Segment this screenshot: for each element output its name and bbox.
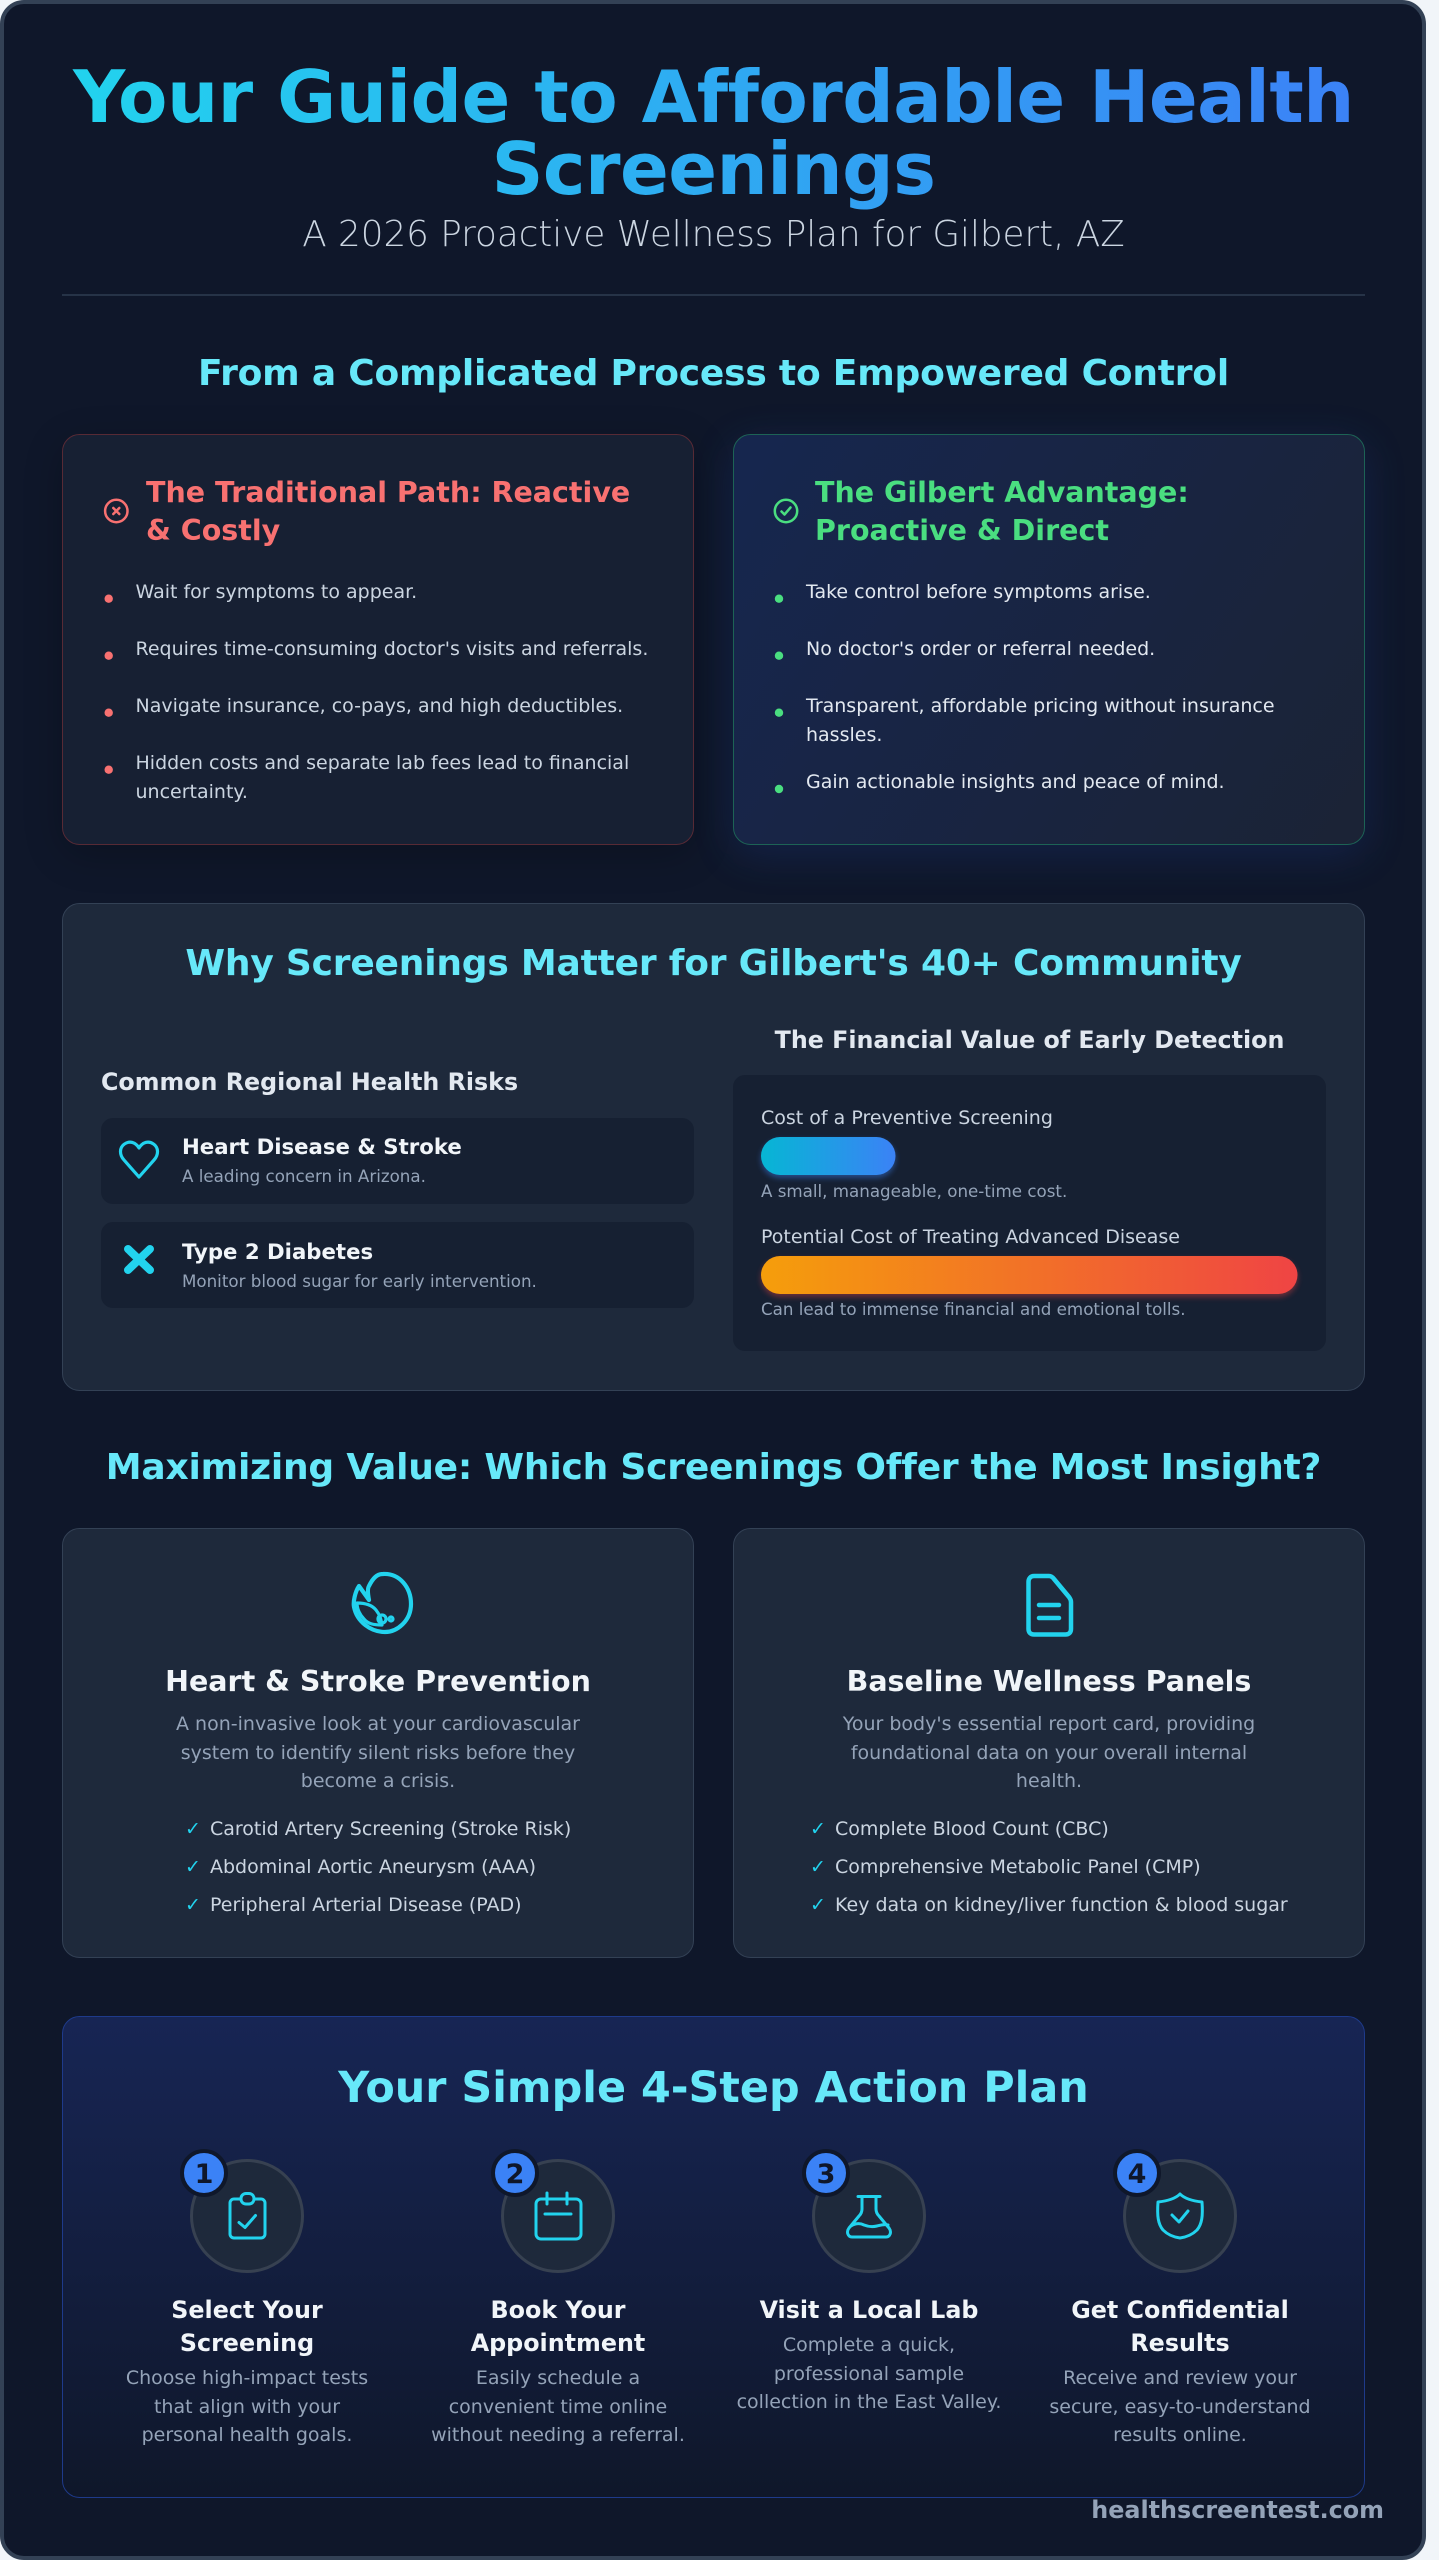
list: gilbert benefits: No doctor's order or referral needed. (806, 638, 1155, 660)
title (72, 55, 1354, 211)
list: traditional drawbacks: Wait for symptoms to appear. (136, 581, 417, 603)
bar: preventive cost (761, 1137, 896, 1175)
text: step 4: Get Confidential (1071, 2296, 1289, 2324)
icon: clipboard (230, 2194, 265, 2238)
panel: gilbert advantage (733, 434, 1365, 855)
text: step 2 (431, 2296, 685, 2446)
list: baseline tests: Comprehensive Metabolic Panel (CMP) (835, 1856, 1201, 1878)
label: heart disease (182, 1135, 462, 1186)
step 4: get results (1049, 2151, 1311, 2446)
label: advanced disease cost: Potential Cost of Treating Advanced Disease (761, 1226, 1180, 1248)
text: heart description: become a crisis. (301, 1770, 455, 1792)
badge: 2 (493, 2151, 537, 2195)
badge: 1: 1 (195, 2159, 213, 2190)
list: traditional drawbacks: uncertainty. (136, 781, 248, 803)
text: step 4: results online. (1113, 2424, 1247, 2446)
icon: document (1028, 1576, 1071, 1634)
list: heart screenings: Carotid Artery Screening (Stroke Risk) (210, 1818, 571, 1840)
panel: action plan (62, 2016, 1364, 2498)
icon: shield (1158, 2194, 1202, 2238)
text: step 2: Book Your (490, 2296, 626, 2324)
text: step 1 (126, 2296, 368, 2446)
heading: maximizing value: Maximizing Value: Which Screenings Offer the Most Insight? (106, 1447, 1321, 1488)
text: step 4 (1049, 2296, 1311, 2446)
label: heart disease: Heart Disease & Stroke (182, 1135, 462, 1160)
heading: gilbert advantage: The Gilbert Advantage: (815, 476, 1189, 509)
heading: heart and stroke: Heart & Stroke Prevention (165, 1665, 591, 1698)
label: diabetes: Type 2 Diabetes (182, 1240, 373, 1265)
list: baseline tests: ✓ (810, 1894, 826, 1916)
text: baseline description: health. (1016, 1770, 1082, 1792)
list: gilbert benefits: Take control before symptoms arise. (805, 581, 1151, 603)
heading: baseline panels: Baseline Wellness Panels (847, 1665, 1251, 1698)
text: step 4: Results (1130, 2329, 1230, 2357)
text: step 1: personal health goals. (142, 2424, 352, 2446)
text: step 3: collection in the East Valley. (737, 2391, 1001, 2413)
list: traditional drawbacks: Navigate insurance, co-pays, and high deductibles. (136, 695, 623, 717)
heading: why screenings matter: Why Screenings Matter for Gilbert's 40+ Community (185, 943, 1242, 984)
badge: 1 (182, 2151, 226, 2195)
list: heart screenings: ✓ (185, 1856, 201, 1878)
list: baseline tests (810, 1818, 1288, 1916)
text: step 1: that align with your (154, 2396, 340, 2418)
bar: advanced disease cost (761, 1256, 1298, 1294)
text: heart description (176, 1713, 580, 1792)
step 1: select screening (126, 2151, 368, 2446)
label: diabetes: Monitor blood sugar for early intervention. (182, 1271, 537, 1291)
text: step 4: secure, easy-to-understand (1049, 2396, 1311, 2418)
icon: heart (120, 1142, 158, 1177)
list: baseline tests: Complete Blood Count (CBC) (835, 1818, 1109, 1840)
list: gilbert benefits: Transparent, affordable pricing without insurance (805, 695, 1275, 717)
step 3: visit lab (737, 2151, 1001, 2413)
heading: financial value: The Financial Value of Early Detection (775, 1026, 1284, 1054)
badge: 4 (1115, 2151, 1159, 2195)
heading: gilbert advantage (815, 476, 1189, 547)
note: preventive cost: A small, manageable, one-time cost. (761, 1181, 1067, 1201)
icon: circle x (105, 500, 128, 522)
text: step 3: professional sample (774, 2363, 964, 2385)
list: traditional drawbacks (104, 581, 648, 803)
text: baseline description: Your body's essential report card, providing (842, 1713, 1255, 1735)
step 2: book appointment (431, 2151, 685, 2446)
text: heart description: system to identify silent risks before they (181, 1742, 575, 1764)
list: gilbert benefits: Gain actionable insights and peace of mind. (806, 771, 1225, 793)
text: baseline description (842, 1713, 1255, 1792)
list: baseline tests: ✓ (810, 1856, 826, 1878)
chart: cost comparison (733, 1075, 1326, 1351)
icon: heart health (354, 1574, 411, 1632)
text: step 1: Choose high-impact tests (126, 2367, 368, 2389)
icon: x mark (128, 1249, 150, 1270)
text: step 2: Appointment (471, 2329, 645, 2357)
list: heart screenings: Abdominal Aortic Aneurysm (AAA) (210, 1856, 536, 1878)
list: baseline tests: Key data on kidney/liver function & blood sugar (835, 1894, 1288, 1916)
heading: traditional path: & Costly (146, 514, 281, 547)
text: step 3 (737, 2296, 1001, 2413)
footer: website: healthscreentest.com (1091, 2496, 1384, 2524)
text: step 4: Receive and review your (1063, 2367, 1297, 2389)
title: Your Guide to Affordable Health (72, 55, 1354, 139)
badge: 3: 3 (817, 2159, 835, 2190)
icon: flask (848, 2196, 890, 2237)
list: heart screenings: ✓ (185, 1894, 201, 1916)
text: step 1: Screening (180, 2329, 314, 2357)
icon: circle check (775, 500, 797, 522)
heading: traditional path: The Traditional Path: Reactive (146, 476, 630, 509)
list: traditional drawbacks: Requires time-consuming doctor's visits and referrals. (136, 638, 648, 660)
heading: regional risks: Common Regional Health Risks (101, 1068, 518, 1096)
text: baseline description: foundational data on your overall internal (851, 1742, 1247, 1764)
text: step 2: Easily schedule a (476, 2367, 640, 2389)
text: heart description: A non-invasive look at your cardiovascular (176, 1713, 580, 1735)
panel: why screenings matter (62, 904, 1364, 1390)
icon: calendar (536, 2193, 581, 2239)
text: step 3: Complete a quick, (783, 2334, 955, 2356)
heading: from complicated to empowered: From a Complicated Process to Empowered Control (198, 353, 1229, 394)
subtitle: A 2026 Proactive Wellness Plan for Gilbert, AZ (302, 214, 1125, 255)
panel: heart and stroke prevention (62, 1528, 694, 1958)
panel: baseline wellness (734, 1528, 1364, 1958)
label: heart disease: A leading concern in Arizona. (182, 1166, 426, 1186)
list: heart screenings (185, 1818, 571, 1916)
note: advanced disease cost: Can lead to immense financial and emotional tolls. (761, 1299, 1186, 1319)
text: step 3: Visit a Local Lab (760, 2296, 978, 2324)
list: baseline tests: ✓ (810, 1818, 826, 1840)
badge: 2: 2 (506, 2159, 524, 2190)
panel: traditional path (62, 434, 694, 855)
label: preventive cost: Cost of a Preventive Screening (761, 1107, 1053, 1129)
badge: 3 (804, 2151, 848, 2195)
heading: traditional path (146, 476, 630, 547)
label: diabetes (182, 1240, 537, 1291)
text: step 2: without needing a referral. (431, 2424, 685, 2446)
heading: gilbert advantage: Proactive & Direct (815, 514, 1109, 547)
list: gilbert benefits (775, 581, 1275, 793)
card: diabetes (101, 1222, 694, 1308)
list: traditional drawbacks: Hidden costs and separate lab fees lead to financial (136, 752, 629, 774)
list: heart screenings: Peripheral Arterial Disease (PAD) (210, 1894, 522, 1916)
text: step 2: convenient time online (449, 2396, 667, 2418)
list: heart screenings: ✓ (185, 1818, 201, 1840)
card: heart disease (101, 1118, 694, 1204)
badge: 4: 4 (1128, 2159, 1146, 2190)
title: Screenings (492, 127, 935, 211)
text: step 1: Select Your (171, 2296, 323, 2324)
heading: action plan: Your Simple 4-Step Action Plan (337, 2063, 1089, 2113)
list: gilbert benefits: hassles. (806, 724, 882, 746)
